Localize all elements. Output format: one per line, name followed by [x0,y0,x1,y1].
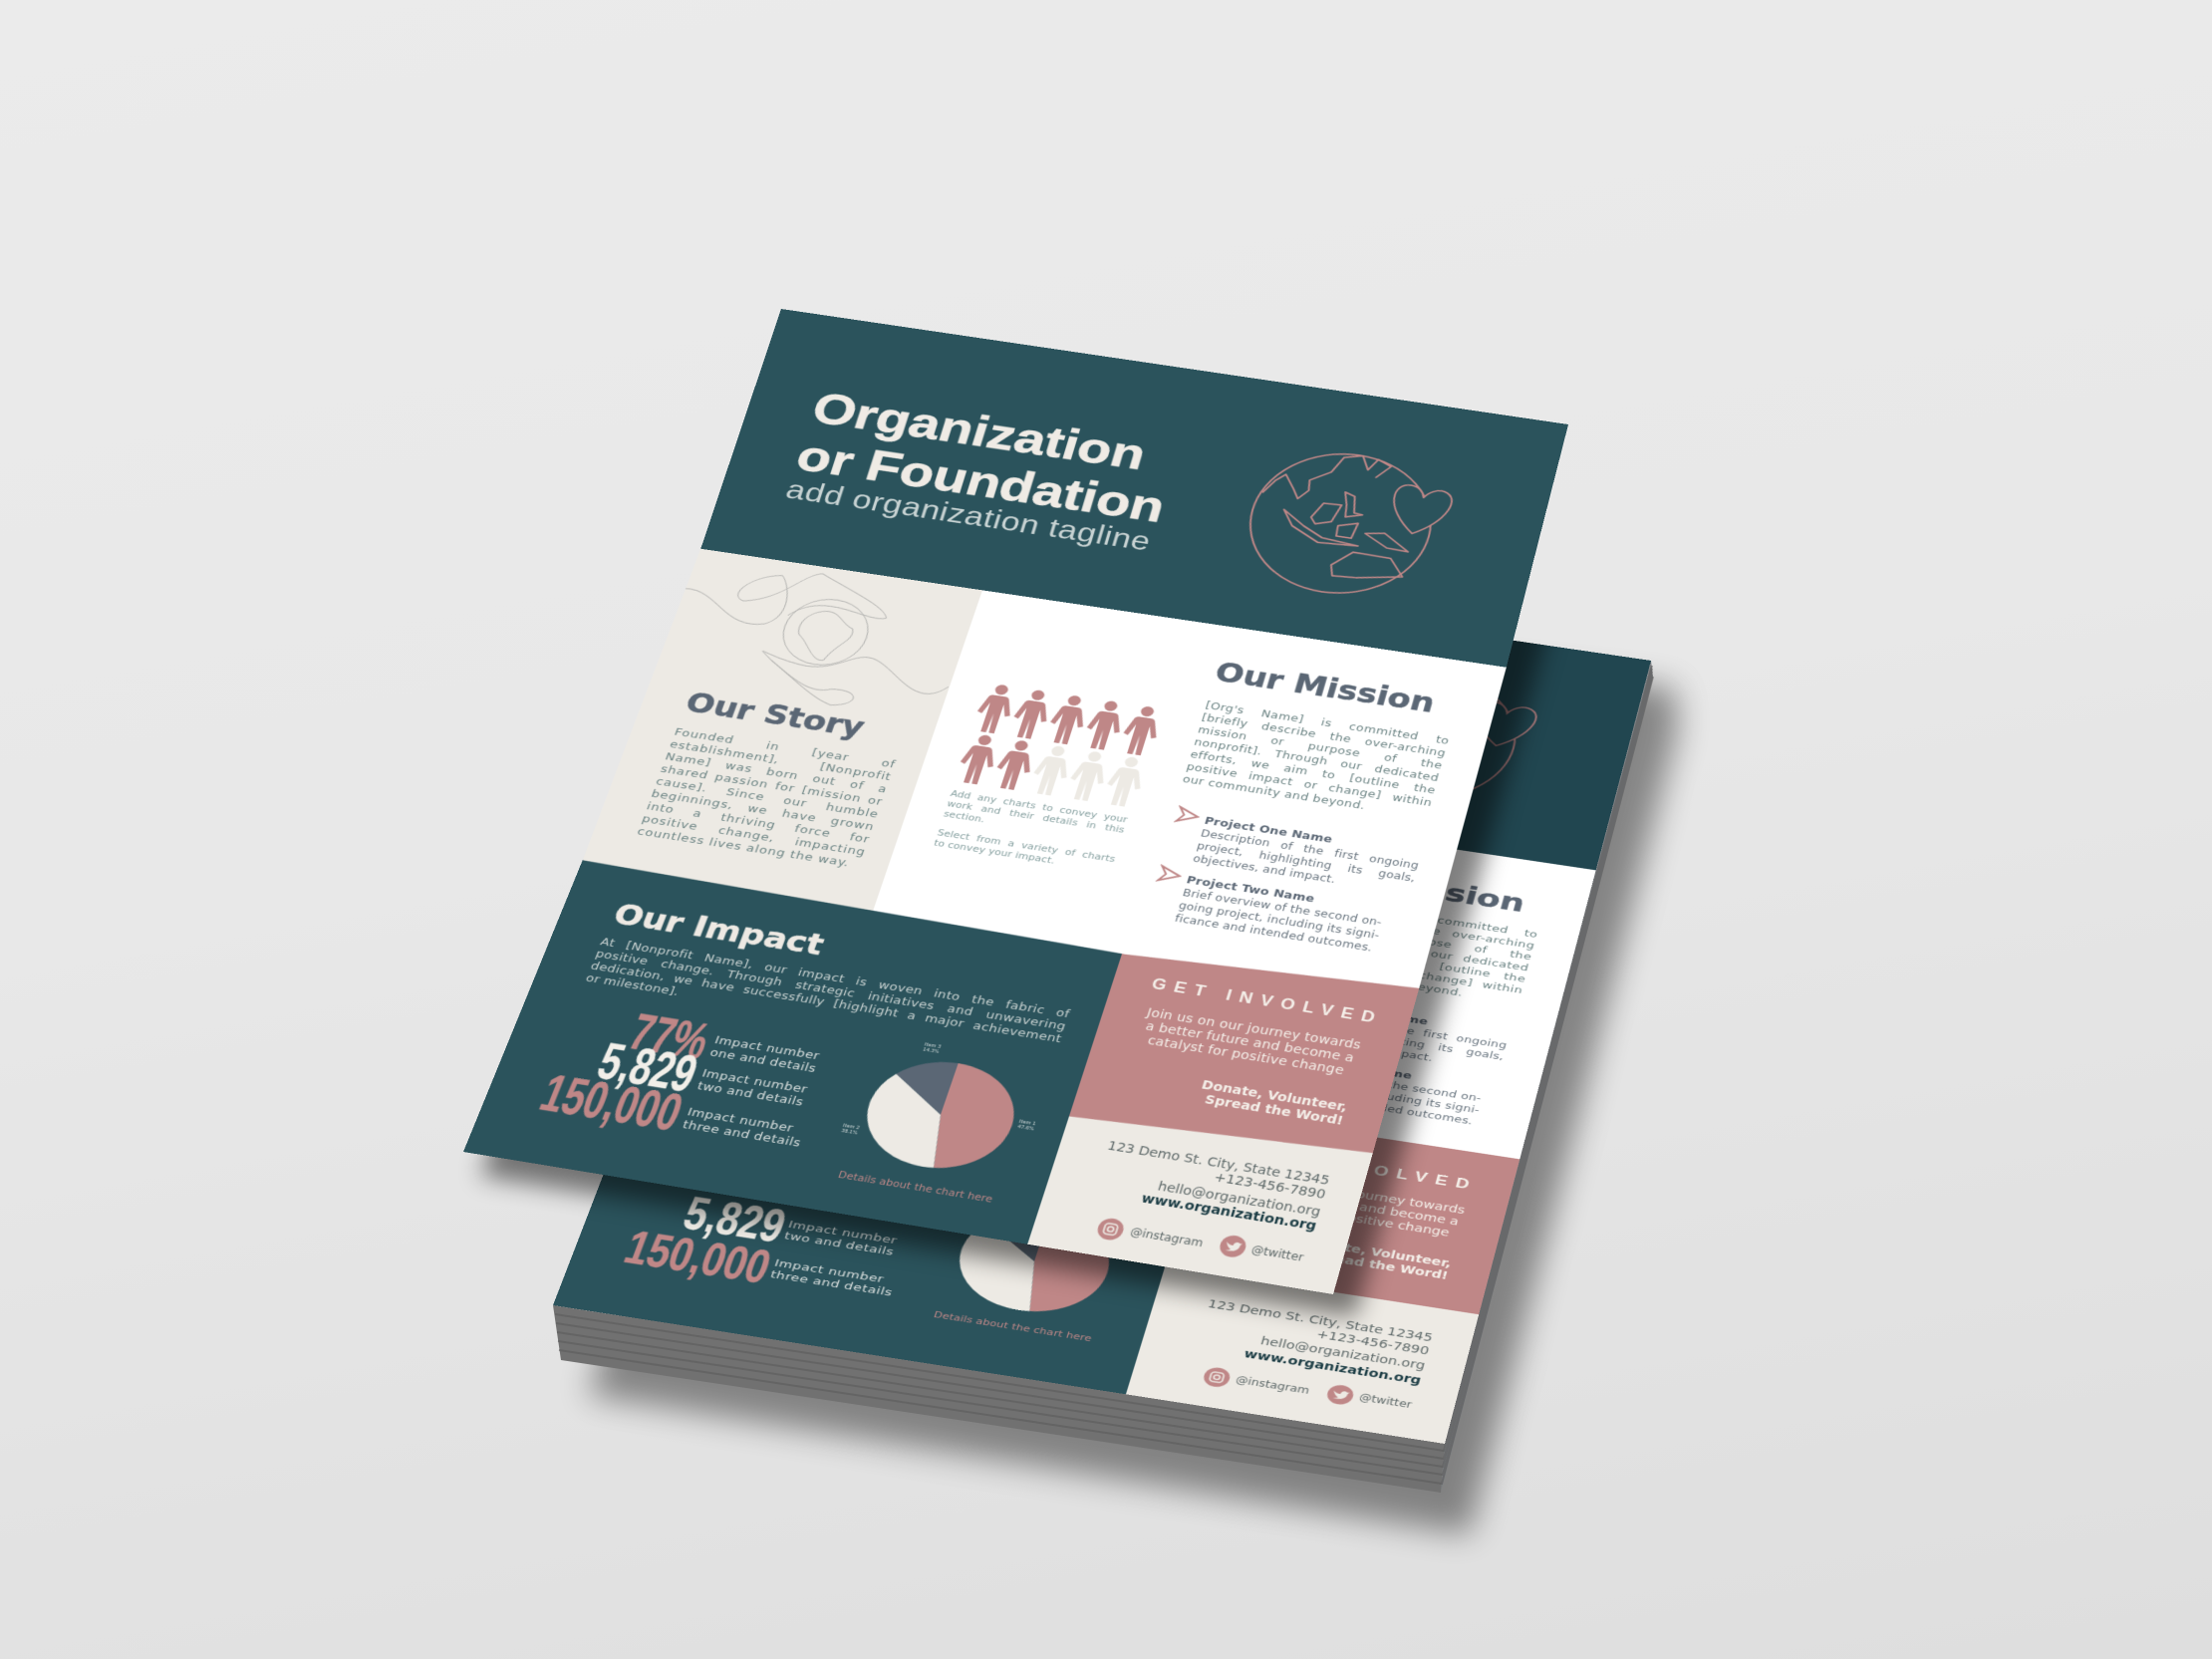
panel: our story [578,548,982,916]
mission text [1182,700,1449,809]
pie labels: Item 2 [842,1123,860,1131]
stat 150,000: 150,000 [533,1063,691,1142]
mission text: [Org's Name] is committed to [1204,698,1451,746]
get involved lower sheet: catalyst for positive change [1254,1198,1451,1240]
flyer top sheet: header [700,309,1568,668]
mission text lower sheet: our community and beyond. [1274,960,1465,998]
address and links: +123-456-7890 [1213,1171,1327,1202]
invitation text: a better future and become a [1144,1019,1356,1065]
projects lower sheet: ficance and intended outcomes. [1269,1086,1474,1127]
story text: into a thriving force for [645,800,872,846]
invitation text: Join us on our journey towards [1145,1006,1363,1052]
mission text: positive impact or change] within [1185,760,1434,809]
get involved lower sheet: a better future and become a [1251,1185,1460,1229]
stat label two [645,1048,809,1109]
story text: cause]. Since our humble [654,775,880,821]
call to action: Donate, Volunteer, [1200,1078,1349,1115]
mission text lower sheet [1274,894,1539,998]
project one [1193,817,1419,883]
icon: arrow two [1156,864,1182,882]
stat numbers lower sheet [618,1187,899,1299]
mission text: [briefly describe the over-arching [1201,711,1447,759]
address and links: www.organization.org [1140,1192,1318,1234]
contact lower sheet: www.organization.org [1243,1348,1423,1387]
projects lower sheet: Brief overview of the second on- [1276,1063,1483,1104]
panel: get involved [1068,943,1419,1169]
project one: Project One Name [1203,814,1334,845]
tagline: add organization tagline [782,475,1155,557]
twitter handle: @twitter [1249,1244,1305,1264]
mission text lower sheet: nonprofit]. Through our dedicated [1284,927,1530,973]
icon: globe with heart [1248,452,1453,594]
story text: Founded in [year of [673,726,898,771]
pie chart [867,1062,1014,1169]
contact lower sheet [1126,1266,1479,1444]
title [790,384,1171,532]
impact text: or milestone]. [584,972,682,998]
contact lower sheet: 123 Demo St. City, State 12345 [1207,1298,1434,1345]
mission text: efforts, we aim to [outline the [1189,748,1437,796]
stat label three: three and details [681,1118,803,1150]
icon: arrow one [1174,805,1200,823]
project one: project, highlighting its goals, [1196,840,1417,884]
impact text: positive change. Through strategic initiatives and unwavering [594,948,1067,1033]
impact text: At [Nonprofit Name], our impact is woven into the fabric of [598,936,1071,1021]
contact lower sheet: @instagram [1235,1374,1311,1396]
icon: instagram [1097,1218,1124,1241]
story text: shared passion for [mission or [659,763,885,808]
stat label two: Impact number [700,1067,809,1096]
project one: objectives, and impact. [1192,853,1337,886]
heading: Our Impact [609,898,829,963]
pie labels: 14.3% [922,1047,940,1055]
chart caption [935,789,1128,864]
story text: positive change, impacting [640,813,867,859]
get involved lower sheet: GET INVOLVED [1242,1143,1480,1193]
contact lower sheet: hello@organization.org [1259,1335,1427,1373]
panel: our mission [871,590,1507,999]
get involved lower sheet: Spread the Word! [1306,1248,1450,1282]
invitation text: catalyst for positive change [1146,1034,1345,1078]
pie labels [840,1042,1036,1136]
stat label one: one and details [707,1046,818,1076]
heading: Our Story [682,687,869,744]
mission text lower sheet: [Org's Name] is committed to [1295,894,1539,940]
chart caption: to convey your impact. [933,838,1056,866]
shadow from top sheet [468,640,1554,1331]
stat numbers lower sheet: three and details [768,1268,894,1299]
project two: Brief overview of the second on- [1181,887,1383,929]
address and links: 123 Demo St. City, State 12345 [1106,1139,1331,1188]
story text: establishment], [Nonprofit [668,738,893,783]
project two [1175,875,1381,952]
chart note: Details about the chart here [837,1170,994,1205]
project two: ficance and intended outcomes. [1174,913,1374,954]
story text: countless lives along the way. [636,826,851,870]
chart caption: work and their details in this [946,799,1126,835]
projects lower sheet [1269,996,1508,1127]
get involved lower sheet [1176,1114,1520,1320]
mission heading lower sheet: Our Mission [1296,857,1527,918]
story text [638,727,897,868]
header band lower sheet [768,534,1654,870]
stat 5,829: 5,829 [590,1032,705,1103]
pie labels: 47.6% [1016,1124,1034,1132]
contact lower sheet: @twitter [1358,1391,1413,1411]
heading: GET INVOLVED [1150,975,1385,1027]
address and links: hello@organization.org [1156,1180,1322,1220]
call to action: Spread the Word! [1203,1093,1345,1128]
flyer top sheet: lower section [463,859,1419,1294]
illustration: hands holding globe [686,573,949,705]
globe lower sheet [1473,698,1538,790]
chart note lower sheet: Details about the chart here [933,1310,1093,1344]
mission text: nonprofit]. Through our dedicated [1193,735,1441,784]
stat label one [645,1034,821,1076]
stat numbers lower sheet: 5,829 [677,1187,792,1252]
mission text lower sheet: [briefly describe the over-arching [1291,905,1536,951]
stat numbers lower sheet: two and details [782,1231,896,1258]
address and links [1108,1141,1329,1233]
flyer top sheet: middle section [582,569,1507,988]
stat label one: Impact number [712,1034,821,1063]
stat numbers lower sheet: 150,000 [618,1221,778,1293]
instagram handle: @instagram [1129,1226,1205,1249]
story text: beginnings, we have grown [650,788,876,834]
mission text lower sheet: mission or purpose of the [1288,916,1533,962]
impact text: dedication, we have successfully [highlight a major achievement [589,960,1063,1046]
stat numbers lower sheet: Impact number [772,1257,886,1285]
title: Organization [806,384,1152,479]
projects lower sheet: Description of the first ongoing [1292,1008,1508,1051]
projects lower sheet: Project One Name [1295,996,1430,1027]
mission text: mission or purpose of the [1197,723,1444,771]
panel: contact [1027,1105,1373,1294]
mission text lower sheet: efforts, we aim to [outline the [1281,938,1527,984]
pie labels: Item 3 [924,1042,942,1050]
pie labels: Item 1 [1018,1119,1036,1127]
invitation text [1144,1006,1363,1078]
projects lower sheet: going project, including its signi- [1272,1074,1481,1116]
projects lower sheet: Project Two Name [1279,1050,1414,1081]
stat 77%: 77% [622,1003,717,1070]
chart caption: section. [943,809,986,825]
stat label three: Impact number [686,1106,795,1135]
get involved lower sheet: Donate, Volunteer, [1302,1236,1453,1270]
project one: Description of the first ongoing [1200,827,1420,872]
mission text: our community and beyond. [1182,772,1367,812]
pictogram chart: people [961,684,1157,807]
projects lower sheet: objectives, and impact. [1285,1031,1434,1063]
impact panel lower sheet [553,1028,1225,1396]
story text: Name] was born out of a [664,751,889,796]
heading: Our Mission [1212,657,1438,719]
pie labels: 38.1% [840,1128,858,1136]
title: or Foundation [790,430,1171,532]
pie lower sheet [959,1236,1110,1312]
panel: our impact [463,859,1127,1244]
chart caption: Add any charts to convey your [950,789,1129,825]
flyer: stacked sheet beneath [553,543,1651,1444]
get involved lower sheet: Join us on our journey towards [1252,1173,1467,1217]
project two: going project, including its signi- [1178,900,1381,942]
stat label two: two and details [695,1080,805,1109]
mission text lower sheet: positive impact or change] within [1278,949,1524,995]
chart caption: Select from a variety of charts [936,828,1117,864]
stat numbers lower sheet: Impact number [786,1219,899,1246]
project two: Project Two Name [1185,873,1316,905]
projects lower sheet: project, highlighting its goals, [1289,1020,1505,1062]
contact lower sheet: +123-456-7890 [1315,1328,1431,1358]
icon: twitter [1220,1236,1246,1257]
